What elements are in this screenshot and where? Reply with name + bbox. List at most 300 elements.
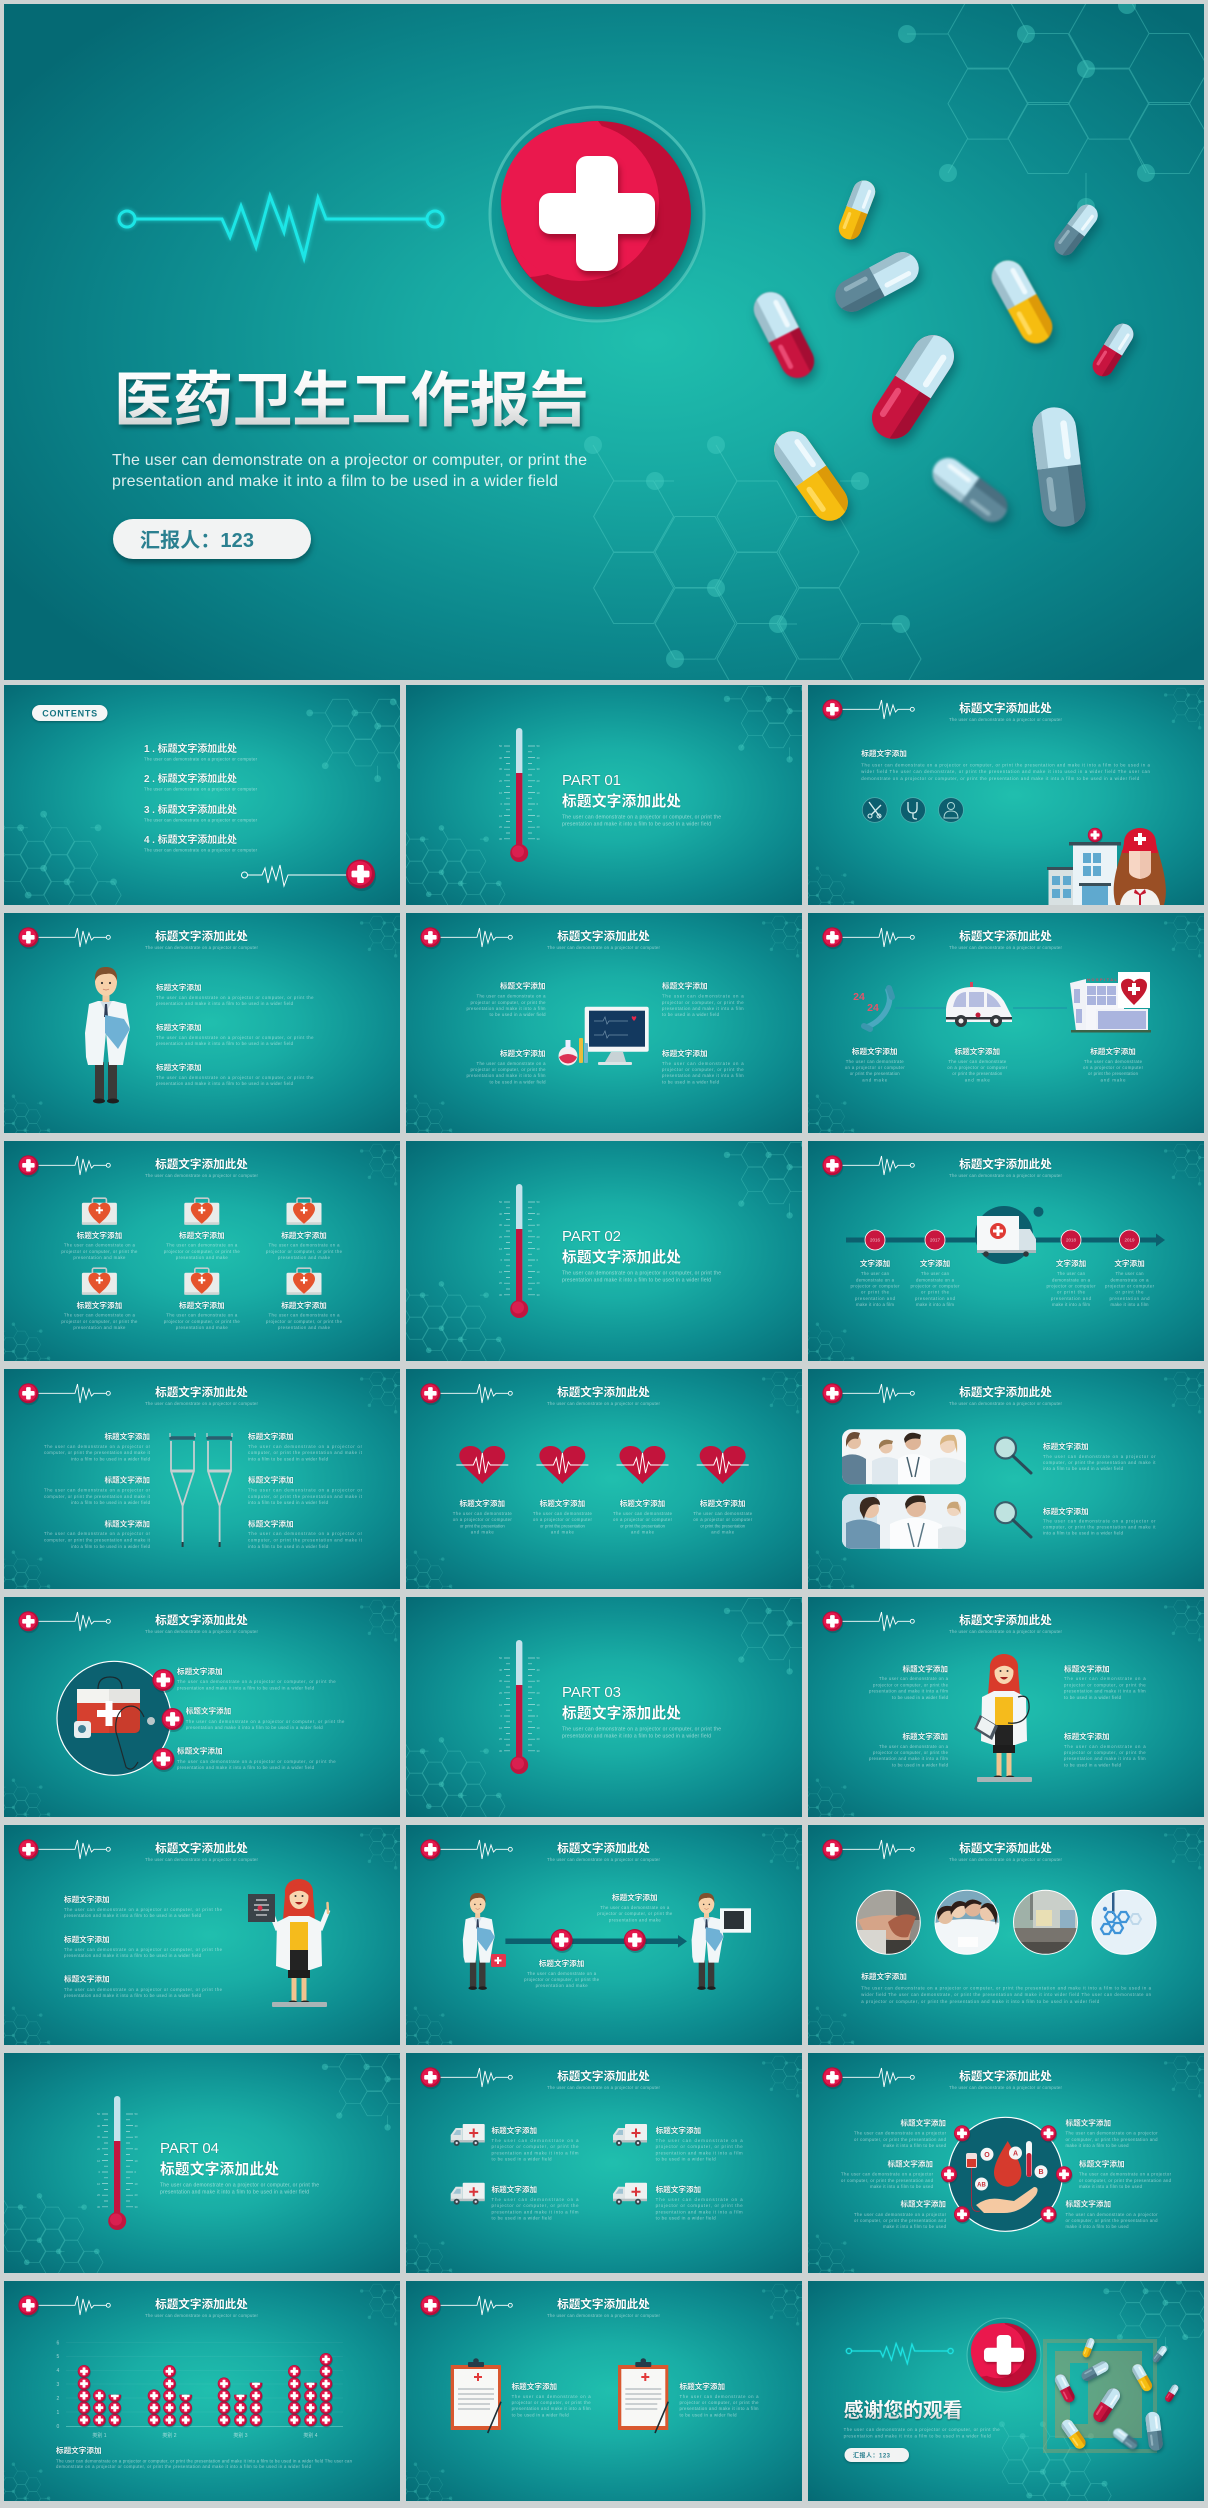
heading: The user can demonstrate on a projector or computer [547,945,661,950]
text right: presentation and make it into a film [680,2406,759,2411]
slide: timeline [808,1141,1204,1361]
heading [145,929,259,950]
captions: or print the presentation [850,1071,900,1076]
timeline captions: or print the [861,1290,890,1294]
text left: or computer, or print the presentation and [841,2178,934,2183]
thermometer scale labels: 10 [499,814,503,818]
heading [547,1385,661,1406]
thermometer scale labels: 50 [134,2112,138,2116]
text left: The user can demonstrate on a [879,1676,949,1681]
icons: kits [82,1198,322,1295]
slide: clipboards [406,2281,802,2501]
slide: four round photos [808,1825,1204,2045]
text left [841,2118,947,2229]
text right: 标题文字添加 [662,1048,708,1058]
captions: The user can demonstrate [1084,1059,1143,1064]
text right: into a film to be used in a wider field [248,1456,329,1462]
hex pattern bottom [584,436,921,694]
part heading: PART 04 [160,2140,219,2157]
chart: pictogram columns: 0 [56,2424,60,2430]
part heading: 标题文字添加此处 [562,792,681,810]
slide: crutches [4,1369,400,1589]
part heading [562,1228,721,1284]
kit captions: The user can demonstrate on a [268,1242,340,1248]
thermometer scale labels: 10 [499,1703,503,1707]
timeline captions: or print the [1116,1290,1144,1294]
part heading: PART 02 [562,1228,621,1245]
thermometer scale labels: 0 [98,2170,100,2174]
illustration: doctor [85,967,130,1104]
heart captions: or print the presentation [620,1524,666,1528]
text items: 标题文字添加 [1043,1441,1089,1451]
part heading: presentation and make it into a film to be used in a wider field [562,822,711,828]
heart captions: and make [711,1530,735,1534]
slide: doctor with three items [4,913,400,1133]
thermometer scale labels: 30 [134,2135,138,2139]
thermometer scale labels: 30 [536,1293,540,1297]
text items: 标题文字添加 [492,2125,537,2135]
text left: to be used in a wider field [892,1762,949,1768]
thermometer scale labels: 10 [134,2159,138,2163]
thermometer scale labels: 0 [536,1714,538,1718]
chart: pictogram columns: 5 [56,2354,60,2360]
heading [949,1841,1063,1862]
text right: presentation and make it into a film [1064,1756,1146,1761]
heading [547,2069,661,2090]
cross markers [941,2125,1073,2224]
part heading [562,1684,721,1740]
thermometer scale labels: 20 [134,2193,138,2197]
text left: 标题文字添加 [512,2381,557,2391]
heading: The user can demonstrate on a projector or computer [949,945,1063,950]
illustration: blood types [948,2117,1062,2231]
text right: 标题文字添加 [248,1518,294,1528]
text right: make it into a film to be used [1066,2224,1129,2229]
text items: The user can demonstrate on a projector or computer, or print the [177,1759,336,1764]
heading: 标题文字添加此处 [959,1385,1052,1399]
kit captions: 标题文字添加 [281,1300,327,1310]
illustration: left doctor with bag [463,1893,506,1990]
thermometer scale labels: 20 [536,1691,540,1695]
text right: presentation and make it into a film [662,1006,744,1011]
category labels: 类别 3 [233,2432,248,2439]
text left: 标题文字添加 [902,1664,948,1674]
icon: clipboard right [618,2358,668,2433]
text right: or computer, or print the presentation and [1079,2178,1172,2183]
text left: 标题文字添加 [500,980,546,990]
kit captions: projector or computer, or print the [266,1249,343,1254]
heading [949,1613,1063,1634]
timeline captions: demonstrate on a [1052,1278,1091,1282]
text right: or computer, or print the presentation and [1066,2137,1158,2142]
slide: part 01 [406,685,802,905]
text items: presentation and make it into a film to be used in a wider field [64,1913,202,1918]
text block: wider field The user can demonstrate, or print the presentation and make it into wider field The user can demonstrate on [861,1992,1152,1997]
heartbeat line [846,2343,953,2364]
text items: 标题文字添加 [177,1666,223,1676]
heading [949,2069,1063,2090]
text right [662,980,744,1084]
heading [145,1841,259,1862]
heading: 标题文字添加此处 [959,1157,1052,1171]
thermometer scale labels: 20 [499,1737,503,1741]
thermometer scale labels: 30 [499,1749,503,1753]
thermometer scale labels: 30 [536,1223,540,1227]
heading: The user can demonstrate on a projector or computer [547,2085,661,2090]
part heading: 标题文字添加此处 [562,1704,681,1722]
text items: The user can demonstrate on a projector or computer, or print the [177,1679,336,1684]
text right: into a film to be used in a wider field [248,1500,329,1505]
kit captions: The user can demonstrate on a [64,1312,136,1318]
heading: The user can demonstrate on a projector or computer [949,1173,1063,1178]
text items: 标题文字添加 [1043,1506,1089,1516]
presenter pill: 汇报人：123 [140,529,254,552]
kit captions: 标题文字添加 [179,1300,225,1310]
icon: scattered capsules [1053,2337,1180,2451]
part heading: The user can demonstrate on a projector or computer, or print the [160,2183,319,2189]
text items: presentation and make it into a film to be used in a wider field [64,1993,202,1998]
text right: to be used in a wider field [1064,1762,1122,1768]
text left: presentation and make it into a film [869,1688,948,1694]
timeline captions: projector or computer [1046,1284,1096,1288]
caption bottom: The user can demonstrate on a [527,1971,597,1976]
text block: 标题文字添加 [861,1971,907,1981]
thermometer scale labels: 30 [499,767,503,771]
part heading [562,772,721,828]
text left: into a film to be used in a wider field [71,1500,151,1505]
captions: or print the presentation [1088,1071,1139,1076]
text right: projector or computer, or print the [662,1000,744,1005]
heartbeat with cross [242,860,376,891]
text items: presentation and make it into a film to be used in a wider field [156,1041,294,1046]
text items: The user can demonstrate on a [492,2138,579,2143]
timeline captions: 文字添加 [1056,1258,1086,1268]
text items: presentation and make it into a film to be used in a wider field [156,1001,294,1006]
captions: 标题文字添加 [1090,1046,1136,1056]
thermometer scale labels: 30 [536,837,540,841]
thermometer scale labels: 30 [97,2205,101,2209]
text left: 标题文字添加 [500,1048,546,1058]
slide: six medical kits [4,1141,400,1361]
timeline captions: The user can [921,1271,950,1276]
icon: scattered capsules [748,177,1137,529]
text right: make it into a film to be used [1079,2184,1143,2189]
thermometer scale labels: 10 [536,1703,540,1707]
heading [145,1385,259,1406]
text left: The user can demonstrate on a projector [854,2212,947,2217]
heart captions: 标题文字添加 [460,1498,505,1508]
caption bottom: projector or computer, or print the [524,1977,600,1982]
text left: 标题文字添加 [104,1431,150,1441]
text left: The user can demonstrate on a [879,1744,949,1749]
text left: or computer, or print the presentation and [854,2137,947,2142]
text left: The user can demonstrate on a projector [841,2172,934,2176]
description: The user can demonstrate on a projector or computer, or print the [844,2427,1000,2432]
text items: 标题文字添加 [656,2125,701,2135]
text items: presentation and make it into a film [656,2150,743,2156]
text left: projector or computer, or print the [470,1000,546,1005]
text left: 标题文字添加 [902,1731,948,1741]
heading: 标题文字添加此处 [155,929,248,943]
text left: into a film to be used in a wider field [71,1456,151,1462]
slide: medical bag circle [4,1597,400,1817]
heading: 标题文字添加此处 [155,1613,248,1627]
icon row [862,798,963,822]
thermometer scale labels: 20 [97,2193,101,2197]
caption bottom: presentation and make [536,1983,588,1988]
text right: into a film to be used in a wider field [248,1544,329,1549]
text items: computer, or print the presentation and make it [1043,1460,1156,1465]
slide: part 02 [406,1141,802,1361]
slide: female doctor with x-ray [4,1825,400,2045]
thermometer scale labels: 10 [134,2182,138,2186]
photo: holding hands [856,1890,921,1955]
part heading: 标题文字添加此处 [562,1248,681,1266]
category labels: 类别 4 [303,2432,318,2439]
blood type labels: B [1038,2169,1044,2176]
kit captions: 标题文字添加 [77,1300,122,1310]
thermometer scale labels: 50 [536,744,540,748]
thermometer scale labels: 20 [536,1737,540,1741]
captions: 标题文字添加 [955,1046,1000,1056]
heading [949,929,1063,950]
heading: The user can demonstrate on a projector or computer [145,1173,259,1178]
timeline captions: presentation and [915,1296,956,1301]
contents list: The user can demonstrate on a projector or computer [144,786,258,792]
text items [156,982,314,1086]
caption top: 标题文字添加 [612,1892,658,1902]
photo: laboratory [1013,1890,1078,1957]
text block: The user can demonstrate on a projector or computer, or print the presentation and make it into a film to be used in a wider field The user can [56,2458,353,2464]
text items: The user can demonstrate on a [492,2197,579,2202]
kit captions: 标题文字添加 [281,1230,327,1240]
icon: ambulance [946,982,1012,1027]
illustration: monitor and flask [558,1007,649,1066]
text right: 标题文字添加 [248,1475,294,1485]
text left: to be used in a wider field [512,2412,569,2418]
kit captions: presentation and make [278,1255,331,1260]
heart captions: or print the presentation [540,1524,586,1528]
slide: four hearts [406,1369,802,1589]
text items: projector or computer, or print the [492,2144,579,2149]
text items: The user can demonstrate on a projector or computer, or print the [156,1075,314,1080]
thermometer scale labels: 20 [499,825,503,829]
timeline captions: 文字添加 [860,1258,890,1268]
hex pattern top right [898,0,1208,216]
text items: to be used in a wider field [656,2156,716,2162]
text right: or computer, or print the presentation and [1066,2218,1158,2223]
text block: 标题文字添加 [861,748,907,758]
text left [869,1664,949,1768]
illustration: female doctor [974,1654,1032,1782]
text items: The user can demonstrate on a projector or computer, or print the [186,1719,345,1724]
text right: projector or computer, or print the [662,1067,744,1072]
kit captions: projector or computer, or print the [164,1319,240,1324]
heart captions: The user can demonstrate [533,1511,593,1516]
text left: 标题文字添加 [900,2118,946,2128]
text left: to be used in a wider field [490,1012,546,1017]
text left: computer, or print the presentation and make it [44,1450,151,1455]
thermometer scale labels: 30 [536,1679,540,1683]
timeline captions: 文字添加 [920,1258,950,1268]
arrow with crosses [505,1929,687,1953]
heading: 标题文字添加此处 [959,1841,1052,1855]
description [844,2427,1000,2438]
captions: and make [965,1078,990,1082]
heading: The user can demonstrate on a projector or computer [145,1857,259,1862]
text items: The user can demonstrate on a projector or computer, or print the [156,1035,314,1040]
text items: presentation and make it into a film to be used in a wider field [177,1686,315,1690]
slide: monitor with four items [406,913,802,1133]
caption bottom [524,1958,600,1988]
heart captions: on a projector or computer [613,1517,673,1522]
kit captions: presentation and make [73,1325,126,1330]
text right: computer, or print the presentation and make it [248,1450,363,1455]
photo: smiling team [935,1890,999,1955]
timeline captions: projector or computer [910,1284,960,1288]
part heading: 标题文字添加此处 [160,2160,279,2178]
heading: 标题文字添加此处 [557,929,650,943]
thermometer scale labels: 40 [134,2124,138,2128]
text right: projector or computer, or print the [1064,1682,1146,1688]
year nodes: 2017 [930,1238,941,1243]
thermometer scale labels: 0 [134,2170,136,2174]
text left: or computer, or print the presentation and [854,2218,947,2223]
text left: presentation and make it into a film [466,1006,546,1011]
heart captions [453,1498,753,1534]
part heading: presentation and make it into a film to be used in a wider field [562,1278,711,1284]
heading: 标题文字添加此处 [959,929,1052,943]
part heading: The user can demonstrate on a projector or computer, or print the [562,1727,721,1733]
text right: to be used in a wider field [662,1080,720,1084]
heading: 标题文字添加此处 [155,1157,248,1171]
slide: thank you [808,2281,1204,2501]
description [112,452,587,490]
text left: make it into a film to be used [883,2143,947,2148]
text items: The user can demonstrate on a [656,2197,743,2202]
thermometer scale labels: 20 [499,1281,503,1285]
text items: to be used in a wider field [492,2216,552,2220]
chart: pictogram columns: 3 [56,2382,60,2388]
thermometer scale labels: 10 [97,2182,101,2186]
slide: part 04 [4,2053,400,2273]
text items: 标题文字添加 [492,2184,537,2194]
heading [547,929,661,950]
thermometer scale labels: 10 [536,1247,540,1251]
text right: 标题文字添加 [1064,1664,1110,1674]
icon: 24 hour phone [853,988,892,1029]
text right: to be used in a wider field [680,2412,737,2418]
description: presentation and make it into a film to be used in a wider field [844,2434,991,2438]
description: The user can demonstrate on a projector or computer, or print the [112,452,587,469]
category labels [92,2432,318,2439]
year nodes: 2019 [1124,1238,1135,1243]
thermometer scale labels: 50 [536,1200,540,1204]
kit captions: presentation and make [73,1255,126,1260]
captions: and make [862,1078,888,1082]
slide: blood types circle [808,2053,1204,2273]
text right: projector or computer, or print the [680,2400,759,2405]
text left: 标题文字添加 [104,1475,150,1485]
illustration: right doctor with x-ray [692,1893,751,1990]
text items: into a film to be used in a wider field [1043,1530,1124,1536]
contents list: 2 . 标题文字添加此处 [144,772,237,785]
part heading: PART 01 [562,772,621,789]
heart captions: The user can demonstrate [613,1511,673,1516]
text items: 标题文字添加 [156,1022,202,1032]
heading [547,1841,661,1862]
text right: to be used in a wider field [1064,1695,1122,1700]
text right: to be used in a wider field [662,1012,720,1017]
thermometer scale labels: 10 [536,1270,540,1274]
text right: 标题文字添加 [662,980,708,990]
icons: ambulance trucks [451,2124,647,2205]
heading [145,1157,259,1178]
thermometer scale labels [499,744,540,841]
blood type labels: AB [977,2182,986,2188]
text items: 标题文字添加 [177,1746,223,1756]
text left [44,1431,151,1549]
illustration: medical bag in circle [57,1661,171,1775]
text left: The user can demonstrate on a [512,2394,591,2399]
chart: pictogram columns: 4 [56,2368,60,2374]
kit captions: projector or computer, or print the [266,1319,343,1324]
heart captions: 标题文字添加 [700,1498,745,1508]
heart captions: on a projector or computer [693,1517,753,1522]
slide: ambulances with four items [406,2053,802,2273]
kit captions: presentation and make [176,1255,228,1260]
thermometer scale labels: 30 [499,1679,503,1683]
thank-you title: 感谢您的观看 [844,2399,963,2422]
text left: The user can demonstrate on a projector or [44,1444,151,1449]
text left: into a film to be used in a wider field [71,1544,151,1549]
text block: a projector or computer, or print the presentation and make it into a film to be used in a wider field [861,1999,1100,2004]
thermometer scale labels: 50 [499,1200,503,1204]
heading [949,1157,1063,1178]
kit captions [61,1230,343,1330]
text right: The user can demonstrate on a [662,1061,744,1066]
caption top: The user can demonstrate on a [600,1905,670,1910]
category 1 [78,2365,122,2427]
text items: The user can demonstrate on a [656,2138,743,2143]
text items: 标题文字添加 [64,1934,110,1944]
text items: 标题文字添加 [186,1706,231,1716]
text items: The user can demonstrate on a projector or [1043,1518,1156,1524]
part heading [160,2140,319,2196]
thermometer scale labels: 50 [499,744,503,748]
thermometer scale labels: 10 [499,1726,503,1730]
year nodes: 2016 [870,1238,881,1243]
timeline captions: or print the [1057,1290,1086,1294]
text right: The user can demonstrate on a [662,994,744,998]
thermometer scale labels: 50 [499,1656,503,1660]
heading: The user can demonstrate on a projector or computer [145,945,259,950]
text left: The user can demonstrate on a projector or [44,1531,151,1536]
text left: projector or computer, or print the [873,1750,949,1755]
illustration: crutches [170,1433,232,1547]
text items: computer, or print the presentation and make it [1043,1524,1156,1530]
kit captions: projector or computer, or print the [61,1249,138,1254]
thermometer scale labels: 30 [499,837,503,841]
kit captions: 标题文字添加 [77,1230,122,1240]
hero slide: cover [4,4,1204,680]
captions: on a projector or computer [1083,1065,1144,1070]
slide: two doctors with arrow [406,1825,802,2045]
text left: computer, or print the presentation and make it [44,1538,151,1543]
thermometer scale labels: 20 [536,825,540,829]
thermometer scale labels: 50 [97,2112,101,2116]
timeline captions: demonstrate on a [856,1278,895,1282]
